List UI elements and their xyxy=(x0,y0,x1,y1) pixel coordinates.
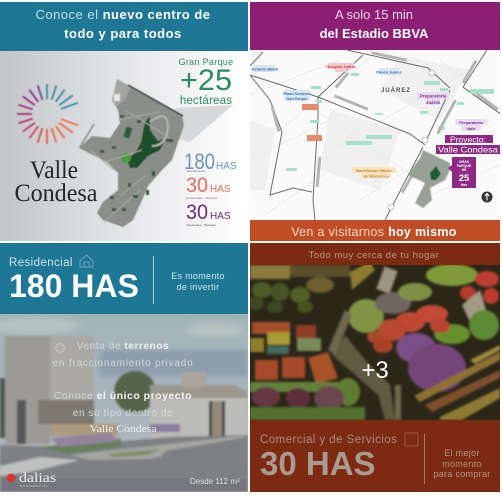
logo wordmark: Valle Condesa: Condesa xyxy=(14,180,98,207)
label: Preparatoria Juárez xyxy=(417,92,449,105)
building elements xyxy=(0,336,248,492)
panel 3 header xyxy=(0,243,248,314)
site plan map xyxy=(79,79,184,227)
text: Es momento de invertir: de invertir xyxy=(177,282,219,292)
stat: 30 HAS industriales xyxy=(186,201,231,227)
stat: Gran Parque +25 hectareas: +25 xyxy=(180,64,232,97)
callout: Proyecto Valle Condesa xyxy=(436,134,500,154)
stat: 30 HAS comercial: Comerciales - Servicios xyxy=(186,196,218,200)
badge: Gran Parque 25 Has xyxy=(448,157,476,188)
stat: 180 HAS residencial: HAS xyxy=(216,161,237,172)
label: Preparatoria Juárez: Juárez xyxy=(426,100,441,105)
text: Desde 112 m2: Desde 112 m² xyxy=(190,477,240,486)
clouds xyxy=(0,318,245,337)
stat: Gran Parque +25 hectareas: Gran Parque xyxy=(179,57,233,67)
label: Plaza Sendero xyxy=(283,90,311,101)
green place labels xyxy=(286,73,494,171)
stat: 180 HAS residencial: 180 xyxy=(184,149,215,174)
panel: mapa Estadio BBVA xyxy=(250,2,502,241)
icon: sun mark xyxy=(56,344,64,352)
label: Preparatoria Juárez: Preparatoria xyxy=(420,94,447,98)
label: Hospital: Hospital Juárez xyxy=(326,64,356,69)
text: Es momento de invertir: Es momento xyxy=(171,271,225,281)
callout: Proyecto Valle Condesa: Valle Condesa xyxy=(438,144,498,154)
icon: shop xyxy=(405,433,418,446)
overlay text: Valle Condesa xyxy=(90,423,157,435)
text: Es momento de invertir xyxy=(171,271,225,292)
text: El mejor momento xyxy=(433,448,491,479)
heading: Todo muy cerca: Todo muy cerca de tu hogar xyxy=(309,250,439,261)
label: Universidad xyxy=(352,167,396,178)
label: Hospital xyxy=(326,63,356,72)
heading: Estadio BBVA: del Estadio BBVA xyxy=(320,26,429,41)
text: El mejor momento: El mejor xyxy=(444,448,480,458)
upper left produce xyxy=(250,265,290,279)
label: Residencial: Residencial xyxy=(9,257,73,269)
label: Preparatoria Valle: Valle xyxy=(466,126,476,131)
purple cauliflower xyxy=(396,333,436,363)
logo wordmark: Valle Condesa xyxy=(14,157,98,207)
crates left xyxy=(252,322,290,334)
label: Paseo Juárez: Paseo Juárez xyxy=(376,70,402,74)
panel 2 header xyxy=(250,2,500,50)
map labels xyxy=(252,51,499,193)
asparagus stripes xyxy=(414,352,500,402)
stat: 180 HAS residencial xyxy=(184,149,237,174)
tomatoes xyxy=(416,305,448,323)
panel 1 background xyxy=(0,51,248,241)
icon: north arrow xyxy=(482,192,492,202)
crate frames xyxy=(332,335,395,420)
bottom left greens xyxy=(250,382,350,392)
stat: 30 HAS industriales: HAS xyxy=(210,211,231,222)
overlay text: Conoce el único proyecto xyxy=(54,390,192,402)
panel: comercial 30 HAS xyxy=(248,243,500,492)
label: Plaza Sendero: San Roque xyxy=(287,96,308,101)
project site on map xyxy=(408,150,450,208)
map background xyxy=(250,50,500,221)
callout wedge xyxy=(165,105,233,142)
overlay text: Venta de terrenos xyxy=(77,341,169,352)
callout: Proyecto Valle Condesa: Proyecto: xyxy=(450,134,486,144)
sign xyxy=(376,266,398,294)
stat: 30 HAS industriales: 30 xyxy=(186,201,208,224)
icon: route shields xyxy=(388,70,435,210)
icon: house xyxy=(80,255,93,267)
panel 1 header xyxy=(0,2,248,51)
photo: market produce xyxy=(248,262,500,420)
label: Plaza Sendero: Plaza Sendero xyxy=(283,91,311,96)
figure: 30 HAS: 30 HAS xyxy=(260,445,376,482)
heading: Estadio BBVA xyxy=(320,7,429,41)
footer: Ven a visitarnos xyxy=(250,220,500,241)
stat: 30 HAS comercial: 30 xyxy=(186,174,208,197)
stat: 30 HAS comercial xyxy=(186,174,231,200)
logo wordmark: Valle Condesa: Valle xyxy=(30,157,78,184)
badge: Gran Parque 25 Has: DE xyxy=(462,168,467,172)
label: Universidad: de Monterrey xyxy=(363,174,389,178)
icon: Valle Condesa sunburst logo xyxy=(17,84,78,144)
label: Juárez: JUÁREZ xyxy=(381,87,411,94)
map roads xyxy=(250,50,502,220)
text: El mejor momento: momento xyxy=(442,459,482,469)
divider xyxy=(153,256,154,304)
stat: 180 HAS residencial: Residenciales xyxy=(187,169,206,173)
text: El mejor momento: para comprar xyxy=(433,469,491,479)
center greens xyxy=(348,299,384,333)
label: Preparatoria Valle: Preparatoria xyxy=(459,120,484,125)
divider xyxy=(424,434,425,484)
panel 4 background xyxy=(250,243,500,492)
overlay text: en fraccionamiento privado xyxy=(53,358,193,369)
label: Preparatoria Valle xyxy=(455,119,487,131)
panel: nuevo centro xyxy=(0,2,248,241)
heading: Estadio BBVA: A solo 15 min xyxy=(335,7,413,22)
heading: nuevo centro: Conoce el nuevo centro de xyxy=(35,7,211,22)
stat: 30 HAS industriales: Industriales - Bodegas xyxy=(186,223,216,227)
count overlay: +3: +3 xyxy=(361,357,389,384)
overlay text: en su tipo dentro de xyxy=(73,408,173,419)
heading: nuevo centro xyxy=(35,7,211,41)
stat: Gran Parque +25 hectareas xyxy=(179,57,233,107)
label: Estadio BBVA: Estadio BBVA xyxy=(252,66,278,72)
badge: Gran Parque 25 Has: PARQUE xyxy=(457,164,472,168)
figure: 180 HAS: 180 HAS xyxy=(9,268,139,304)
logo: dalias xyxy=(7,471,56,488)
photo: house render xyxy=(0,314,248,492)
logo: dalias: dalias xyxy=(19,471,56,486)
logo: dalias: RESIDENCIAL xyxy=(20,484,49,488)
badge: Gran Parque 25 Has: 25 xyxy=(459,173,470,184)
badge: Gran Parque 25 Has: Has xyxy=(461,183,467,187)
badge: Gran Parque 25 Has: GRAN xyxy=(459,160,470,164)
road name labels xyxy=(271,51,499,193)
label: orange boxes xyxy=(302,104,322,141)
stat: Gran Parque +25 hectareas: hectáreas xyxy=(180,95,232,107)
panel: residencial 180 HAS xyxy=(0,243,248,492)
heading: nuevo centro: todo y para todos xyxy=(64,26,182,41)
label: Comercial y de Servicios: Comercial y de Servicios xyxy=(260,434,397,446)
stat: 30 HAS comercial: HAS xyxy=(210,184,231,195)
footer text: Ven a visitarnos hoy mismo xyxy=(291,225,457,239)
overlay text xyxy=(53,341,193,435)
label: Universidad: Bachillerato Mayor xyxy=(356,168,392,173)
